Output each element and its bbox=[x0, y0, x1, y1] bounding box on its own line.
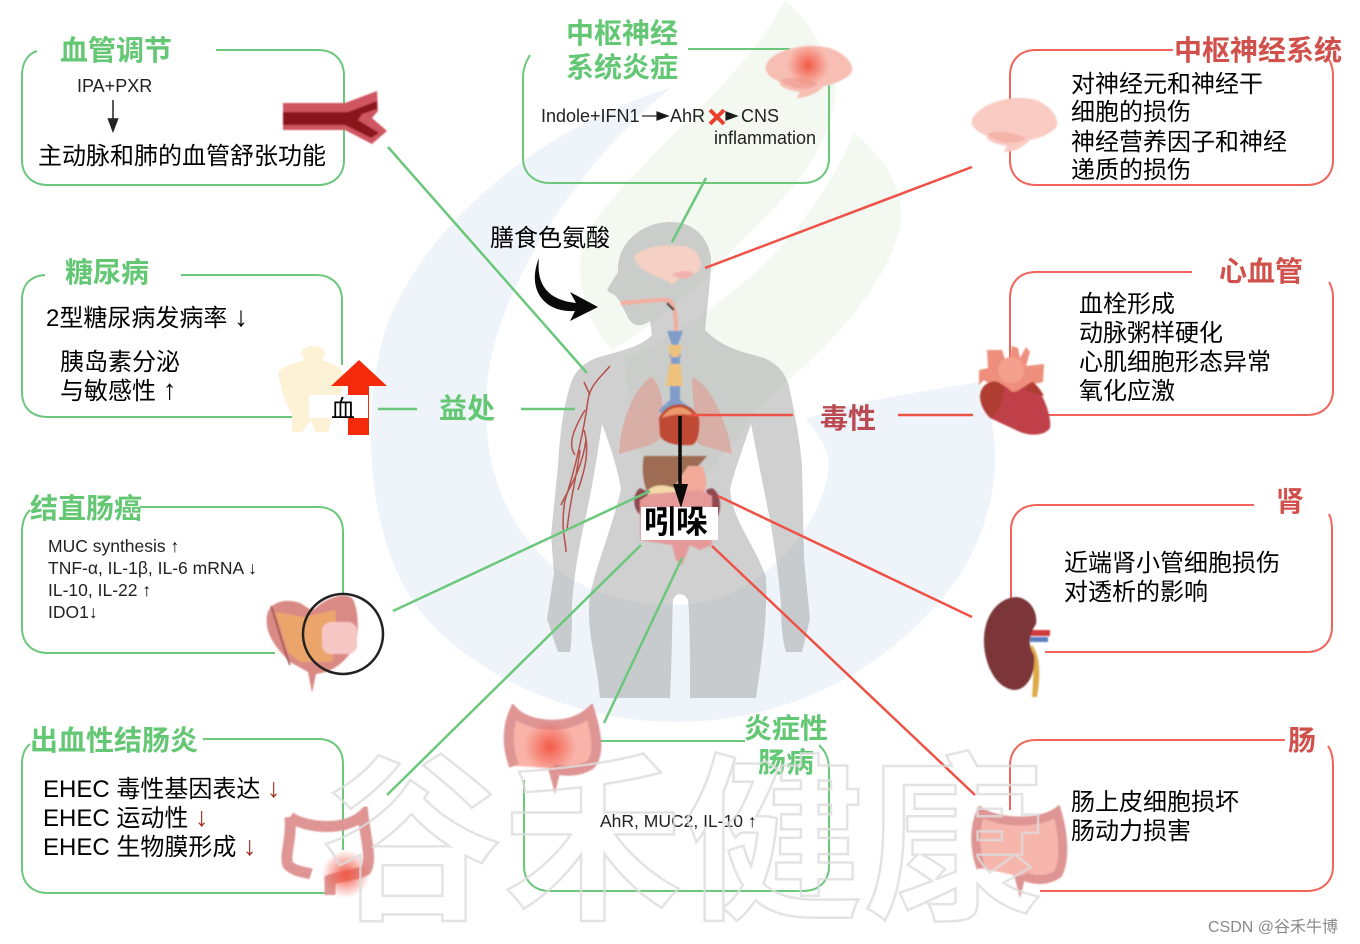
icon: colon with lower-left inflammation bbox=[287, 815, 370, 898]
panel: cardiovascular: 氧化应激 bbox=[1079, 378, 1175, 405]
panel: vascular regulation: 主动脉和肺的血管舒张功能 bbox=[38, 143, 326, 170]
panel: CNS inflammation: Indole+IFN1 bbox=[541, 106, 640, 126]
panel: cardiovascular: 心肌细胞形态异常 bbox=[1079, 349, 1271, 376]
panel: colorectal cancer: IDO1↓ bbox=[48, 602, 98, 622]
panel: hemorrhagic colitis: EHEC 毒性基因表达 ↓ bbox=[43, 773, 281, 803]
panel: CNS inflammation: 中枢神经 bbox=[566, 18, 678, 49]
icon: heart bbox=[979, 346, 1050, 435]
panel: cardiovascular: 动脉粥样硬化 bbox=[1079, 320, 1223, 347]
panel: diabetes: 糖尿病 bbox=[65, 257, 149, 288]
panel: kidney bbox=[984, 486, 1332, 697]
central heart bbox=[659, 404, 699, 445]
panel: diabetes: 与敏感性 ↑ bbox=[60, 374, 177, 405]
panel: diabetes: 胰岛素分泌 bbox=[60, 349, 180, 376]
label: dietary tryptophan: 膳食色氨酸 bbox=[490, 225, 610, 252]
credit: CSDN @谷禾牛博 bbox=[1208, 918, 1338, 936]
panel: vascular regulation bbox=[22, 35, 387, 185]
panel: CNS damage bbox=[972, 35, 1342, 185]
panel: CNS damage: 神经营养因子和神经 bbox=[1071, 129, 1287, 156]
liver and digestive organs bbox=[634, 456, 720, 565]
panel: colorectal cancer: IL-10, IL-22 ↑ bbox=[48, 580, 151, 600]
panel: intestine bbox=[976, 725, 1333, 898]
panel: colorectal cancer: TNF-α, IL-1β, IL-6 mRNA ↓ bbox=[48, 558, 257, 578]
icon: brain bbox=[972, 98, 1057, 152]
dietary tryptophan arrow bbox=[535, 258, 598, 321]
panel: CNS inflammation: inflammation bbox=[714, 128, 816, 148]
panel: colorectal cancer: 结直肠癌 bbox=[30, 493, 142, 524]
panel: cardiovascular bbox=[979, 256, 1333, 435]
icon: magnifier ring bbox=[303, 594, 383, 674]
panel: hemorrhagic colitis: EHEC 生物膜形成 ↓ bbox=[43, 831, 257, 861]
panel: kidney: 肾 bbox=[1276, 486, 1304, 517]
esophagus and trachea bbox=[621, 300, 693, 414]
arrow: heart to indole bbox=[673, 416, 688, 508]
panel: CNS inflammation: AhR bbox=[670, 106, 705, 126]
toxicity heading: 毒性 bbox=[820, 403, 876, 434]
panel: cardiovascular: 血栓形成 bbox=[1079, 291, 1175, 318]
panel: colorectal cancer bbox=[22, 493, 383, 693]
icon: inflamed brain bbox=[766, 44, 852, 98]
panel: inflammatory bowel disease bbox=[508, 712, 829, 891]
human body silhouette bbox=[547, 222, 810, 698]
icon: colon bbox=[976, 812, 1063, 898]
panel: CNS damage: 细胞的损伤 bbox=[1071, 99, 1191, 126]
panel: CNS damage: 递质的损伤 bbox=[1071, 157, 1191, 184]
lungs bbox=[619, 377, 732, 454]
panel: CNS inflammation: CNS bbox=[741, 106, 779, 126]
panel: cardiovascular: 心血管 bbox=[1219, 256, 1303, 287]
panel: intestine: 肠 bbox=[1288, 725, 1316, 756]
panel: CNS inflammation bbox=[523, 18, 852, 183]
panel: inflammatory bowel disease: 炎症性 bbox=[744, 713, 828, 744]
panel: kidney: 对透析的影响 bbox=[1064, 579, 1208, 606]
panel: intestine: 肠动力损害 bbox=[1071, 818, 1191, 845]
icon: kidney bbox=[984, 597, 1050, 697]
icon: artery bbox=[283, 91, 387, 144]
panel: intestine: 肠上皮细胞损坏 bbox=[1071, 789, 1239, 816]
connector lines bbox=[378, 147, 975, 795]
panel: diabetes: 2型糖尿病发病率 ↓ bbox=[46, 301, 248, 332]
icon: body silhouette and blood sugar arrow bbox=[278, 346, 387, 435]
icon: body silhouette and blood sugar arrow: 血 bbox=[331, 396, 355, 423]
panel: inflammatory bowel disease: 肠病 bbox=[758, 747, 814, 778]
panel: hemorrhagic colitis: EHEC 运动性 ↓ bbox=[43, 802, 209, 832]
panel: hemorrhagic colitis: 出血性结肠炎 bbox=[30, 725, 198, 756]
panel: kidney: 近端肾小管细胞损伤 bbox=[1064, 550, 1280, 577]
brain in head bbox=[634, 245, 701, 285]
panel: vascular regulation: 血管调节 bbox=[60, 35, 172, 66]
icon: inflamed colon bbox=[508, 712, 596, 794]
icon: rectum tumour bbox=[267, 596, 358, 693]
panel: inflammatory bowel disease: AhR, MUC2, IL-10 ↑ bbox=[600, 811, 757, 831]
panel: hemorrhagic colitis bbox=[22, 725, 370, 898]
panel: CNS inflammation: 系统炎症 bbox=[566, 52, 678, 83]
indole label: 吲哚 bbox=[644, 504, 708, 540]
panel: CNS damage: 中枢神经系统 bbox=[1174, 35, 1342, 66]
panel: colorectal cancer: MUC synthesis ↑ bbox=[48, 536, 179, 556]
panel: CNS damage: 对神经元和神经干 bbox=[1071, 71, 1263, 98]
benefit heading: 益处 bbox=[439, 393, 495, 424]
background logo bbox=[371, 0, 995, 722]
arm blood vessels bbox=[561, 366, 610, 552]
panel: vascular regulation: IPA+PXR bbox=[77, 76, 152, 96]
panel: diabetes bbox=[22, 257, 387, 435]
